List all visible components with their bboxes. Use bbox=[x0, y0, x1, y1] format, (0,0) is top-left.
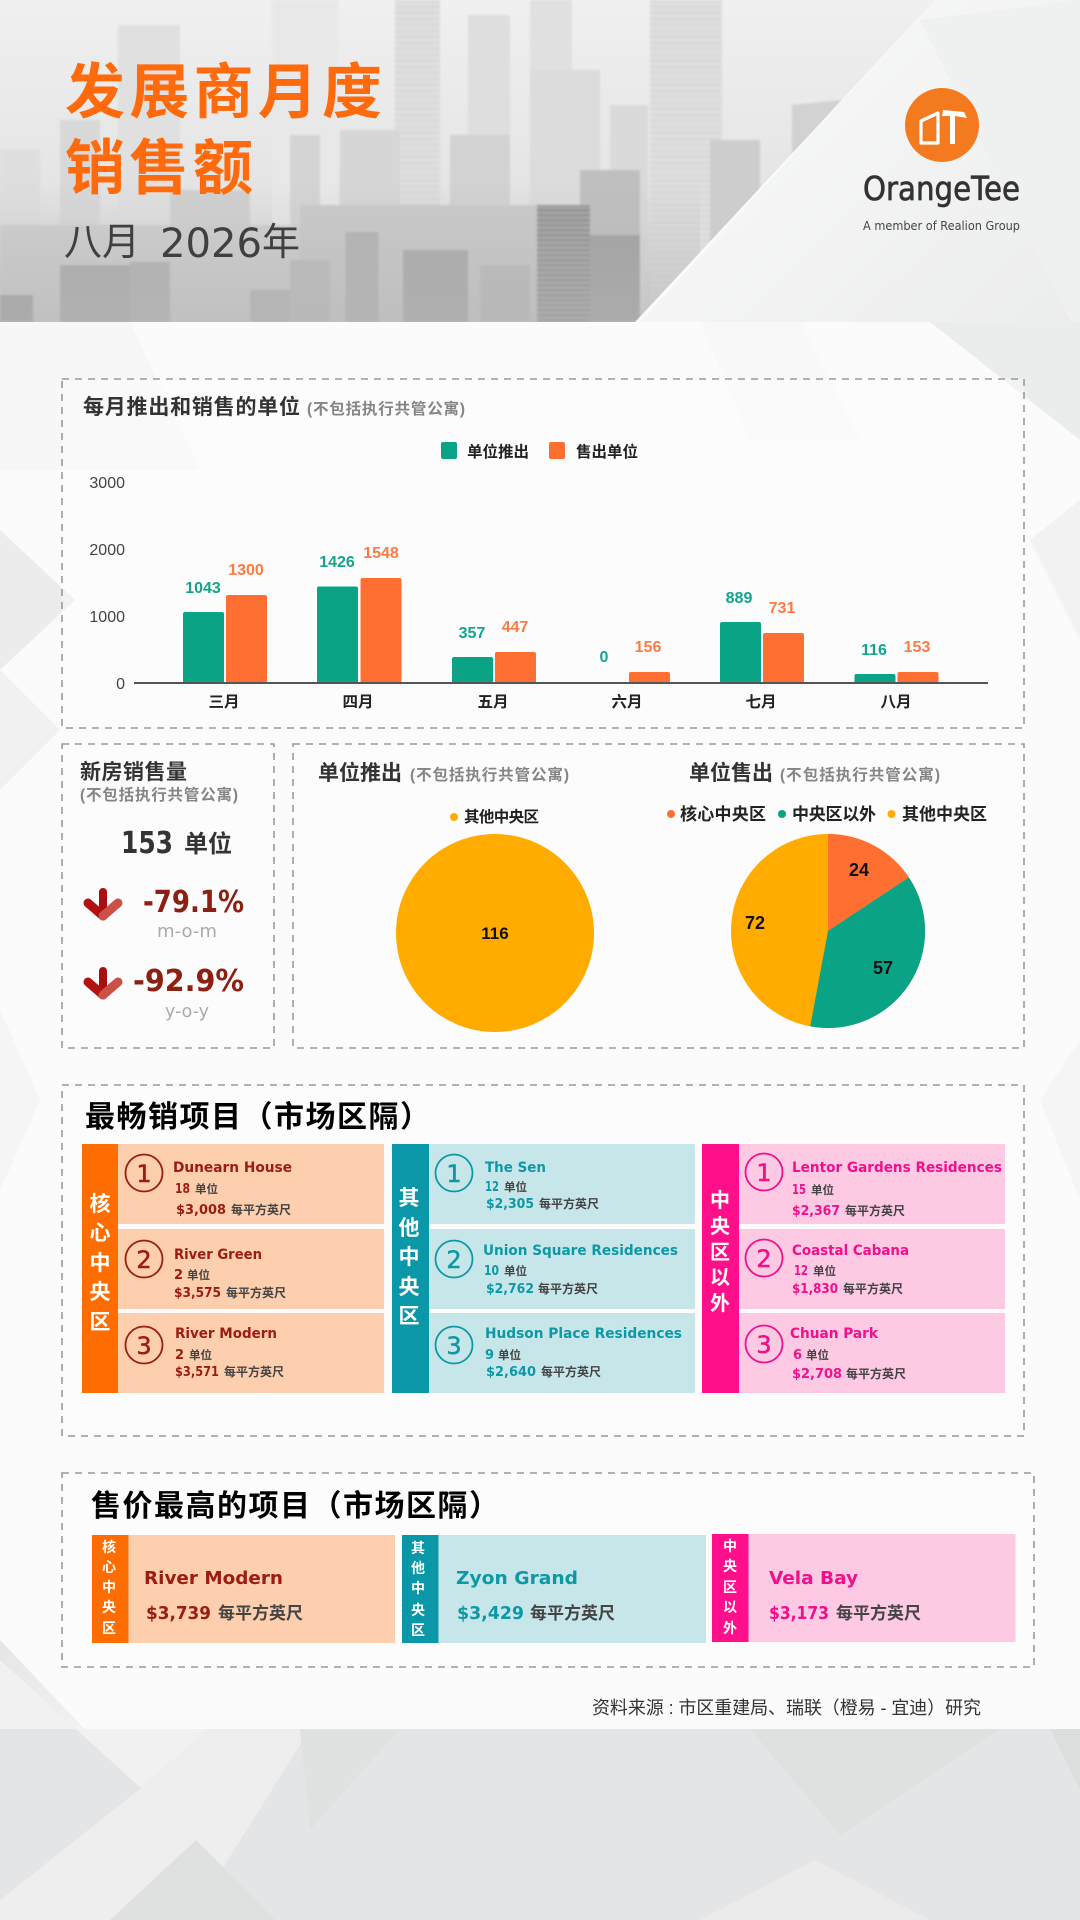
bar value labels: 357 bbox=[459, 625, 485, 642]
heading: units launched: 单位推出 bbox=[318, 761, 402, 785]
rank 1: Dunearn House: 18 bbox=[175, 1182, 190, 1197]
bar value labels: 1043 bbox=[185, 580, 221, 597]
panel: monthly launched and sold units bbox=[62, 379, 1024, 728]
y axis labels: 0 bbox=[116, 676, 125, 693]
rank 1: Lentor Gardens Residences: 每平方英尺 bbox=[845, 1203, 905, 1218]
rank 2: River Green: River Green bbox=[174, 1247, 262, 1263]
y axis labels: 2000 bbox=[89, 542, 125, 559]
rank 3: Hudson Place Residences: 每平方英尺 bbox=[541, 1364, 601, 1379]
card: core central region: 每平方英尺 bbox=[218, 1603, 303, 1623]
bar value labels bbox=[185, 545, 930, 666]
chart legend: 单位推出 bbox=[467, 442, 529, 461]
total units sold bbox=[121, 826, 232, 861]
rank 1: The Sen bbox=[436, 1154, 599, 1212]
column: outside central region: 中央区以外 bbox=[710, 1189, 730, 1315]
card: outside central region: Vela Bay bbox=[769, 1568, 858, 1589]
x axis month labels: 四月 bbox=[342, 694, 374, 711]
x axis month labels: 七月 bbox=[745, 693, 777, 711]
panel: pie charts bbox=[293, 744, 1024, 1048]
bar value labels: 889 bbox=[726, 590, 752, 607]
card: outside central region: $3,173 bbox=[769, 1603, 829, 1624]
panel: best selling projects bbox=[62, 1085, 1024, 1436]
rank 3: Hudson Place Residences: Hudson Place Residences bbox=[485, 1326, 682, 1342]
icon: down arrow year on year bbox=[88, 971, 118, 995]
rank 2: Union Square Residences: 每平方英尺 bbox=[538, 1281, 598, 1296]
month on month change bbox=[143, 885, 244, 942]
rank 3: Chuan Park: 6 bbox=[793, 1348, 802, 1363]
subtitle: month and year bbox=[64, 221, 300, 267]
rank 3: Hudson Place Residences: 3 bbox=[446, 1332, 462, 1360]
rank 3: River Modern bbox=[126, 1326, 284, 1380]
rank 2: Coastal Cabana: 2 bbox=[756, 1245, 772, 1273]
heading: monthly units: 每月推出和销售的单位 bbox=[83, 395, 300, 419]
column: core central region: 核心中央区 bbox=[90, 1192, 110, 1334]
rank 2: River Green: 2 bbox=[136, 1246, 152, 1274]
rank 2: Coastal Cabana: $1,830 bbox=[792, 1282, 838, 1297]
rank 2: River Green: 每平方英尺 bbox=[226, 1285, 286, 1300]
column: core central region bbox=[82, 1144, 384, 1393]
rank 3: Chuan Park: $2,708 bbox=[792, 1367, 842, 1382]
rank 3: River Modern: River Modern bbox=[175, 1326, 277, 1342]
heading: new home sales: (不包括执行共管公寓) bbox=[80, 785, 238, 804]
logo: OrangeTee: OrangeTee bbox=[863, 169, 1020, 208]
rank 2: River Green bbox=[126, 1240, 286, 1301]
legend: launched pie: 其他中央区 bbox=[464, 808, 539, 826]
rank 1: Dunearn House: 每平方英尺 bbox=[231, 1202, 291, 1217]
pie chart: units sold bbox=[731, 834, 925, 1028]
title bbox=[65, 59, 382, 202]
rank 1: Lentor Gardens Residences bbox=[746, 1154, 1002, 1219]
rank 1: Dunearn House: 单位 bbox=[195, 1182, 218, 1196]
panel: new home sales bbox=[62, 744, 274, 1048]
year on year change: y-o-y bbox=[165, 1001, 209, 1022]
y axis labels bbox=[89, 475, 125, 693]
panel: highest priced projects bbox=[62, 1473, 1034, 1667]
rank 3: Chuan Park: Chuan Park bbox=[790, 1326, 879, 1342]
title: 发展商月度 bbox=[65, 59, 382, 126]
month on month change: -79.1% bbox=[143, 885, 244, 920]
logo: OrangeTee bbox=[863, 88, 1020, 233]
card: core central region: 核心中央区 bbox=[102, 1539, 116, 1636]
heading: units sold: (不包括执行共管公寓) bbox=[780, 765, 940, 784]
rank 1: The Sen: The Sen bbox=[485, 1160, 546, 1176]
bar value labels: 447 bbox=[502, 619, 528, 636]
rank 2: Coastal Cabana: 12 bbox=[794, 1264, 808, 1279]
card: core central region bbox=[92, 1535, 395, 1643]
card: core central region: River Modern bbox=[144, 1568, 283, 1589]
bar value labels: 1548 bbox=[363, 545, 399, 562]
rank 1: Lentor Gardens Residences: Lentor Gardens Residences bbox=[792, 1160, 1002, 1176]
rank 2: Union Square Residences: 单位 bbox=[504, 1264, 527, 1278]
rank 2: River Green: $3,575 bbox=[174, 1286, 221, 1301]
legend: sold pie: 中央区以外 bbox=[792, 804, 876, 824]
heading: units launched bbox=[318, 761, 569, 785]
x axis month labels: 八月 bbox=[880, 694, 912, 711]
rank 1: Lentor Gardens Residences: 1 bbox=[756, 1159, 772, 1187]
card: rest of central region: $3,429 bbox=[457, 1603, 524, 1624]
chart legend bbox=[441, 442, 638, 461]
pie chart: units sold: 57 bbox=[873, 958, 893, 978]
icon: down arrow month on month bbox=[88, 892, 118, 916]
rank 2: River Green: 2 bbox=[174, 1268, 183, 1283]
card: outside central region: 每平方英尺 bbox=[836, 1603, 921, 1623]
heading: units sold bbox=[689, 761, 940, 785]
rank 3: Chuan Park: 每平方英尺 bbox=[846, 1366, 906, 1381]
heading: monthly units bbox=[83, 395, 465, 419]
y axis labels: 3000 bbox=[89, 475, 125, 492]
rank 3: Hudson Place Residences: 9 bbox=[485, 1348, 494, 1363]
rank 1: Lentor Gardens Residences: 15 bbox=[792, 1183, 806, 1198]
heading: best selling projects: 最畅销项目（市场区隔） bbox=[85, 1101, 430, 1134]
rank 2: Coastal Cabana: Coastal Cabana bbox=[792, 1243, 909, 1259]
rank 2: Union Square Residences: Union Square Residences bbox=[483, 1243, 678, 1259]
subtitle: month and year: 年 bbox=[262, 222, 300, 264]
year on year change: -92.9% bbox=[133, 964, 244, 999]
heading: new home sales: 新房销售量 bbox=[80, 760, 187, 784]
bar value labels: 156 bbox=[635, 639, 661, 656]
rank 3: Hudson Place Residences: $2,640 bbox=[486, 1365, 536, 1380]
pie chart: units sold: 24 bbox=[849, 860, 869, 880]
rank 3: River Modern: 3 bbox=[136, 1332, 152, 1360]
rank 3: River Modern: 每平方英尺 bbox=[224, 1364, 284, 1379]
card: rest of central region: 每平方英尺 bbox=[530, 1603, 615, 1623]
year on year change bbox=[133, 964, 244, 1022]
bar value labels: 1300 bbox=[228, 562, 264, 579]
rank 3: River Modern: 2 bbox=[175, 1348, 184, 1363]
rank 1: Lentor Gardens Residences: $2,367 bbox=[792, 1204, 840, 1219]
bar value labels: 731 bbox=[769, 600, 795, 617]
heading: units launched: (不包括执行共管公寓) bbox=[410, 765, 569, 784]
rank 1: The Sen: 单位 bbox=[504, 1180, 527, 1194]
card: core central region: $3,739 bbox=[146, 1603, 211, 1624]
heading: highest priced projects: 售价最高的项目（市场区隔） bbox=[91, 1490, 499, 1523]
rank 2: Coastal Cabana: 每平方英尺 bbox=[843, 1281, 903, 1296]
bar value labels: 153 bbox=[904, 639, 930, 656]
heading: new home sales bbox=[80, 760, 238, 804]
source note: 资料来源 : 市区重建局、瑞联（橙易 - 宜迪）研究 bbox=[592, 1698, 981, 1718]
bar chart bbox=[134, 578, 988, 684]
rank 1: Dunearn House: Dunearn House bbox=[173, 1160, 292, 1176]
rank 2: Coastal Cabana: 单位 bbox=[813, 1264, 836, 1278]
rank 1: The Sen: 12 bbox=[485, 1180, 499, 1195]
bar value labels: 1426 bbox=[319, 554, 355, 571]
pie chart: units launched bbox=[396, 834, 594, 1032]
month on month change: m-o-m bbox=[157, 921, 217, 942]
card: rest of central region: Zyon Grand bbox=[456, 1568, 578, 1589]
header cityscape bbox=[0, 0, 935, 322]
rank 2: Union Square Residences: 10 bbox=[484, 1264, 499, 1279]
total units sold: 153 bbox=[121, 826, 173, 861]
heading: units sold: 单位售出 bbox=[689, 761, 773, 785]
x axis month labels: 六月 bbox=[611, 693, 643, 711]
rank 1: The Sen: 1 bbox=[446, 1160, 462, 1188]
rank 2: Union Square Residences: 2 bbox=[446, 1246, 462, 1274]
subtitle: month and year: 八月 bbox=[64, 222, 140, 264]
rank 3: Hudson Place Residences: 单位 bbox=[498, 1348, 521, 1362]
card: rest of central region bbox=[402, 1535, 706, 1643]
pie chart: units launched: 116 bbox=[481, 924, 509, 943]
heading: monthly units: (不包括执行共管公寓) bbox=[307, 399, 465, 418]
column: rest of central region: 其他中央区 bbox=[398, 1187, 420, 1328]
rank 2: Coastal Cabana bbox=[746, 1240, 909, 1297]
x axis month labels: 三月 bbox=[208, 694, 240, 711]
rank 1: The Sen: $2,305 bbox=[486, 1197, 534, 1212]
rank 1: Dunearn House bbox=[126, 1154, 292, 1218]
rank 2: River Green: 单位 bbox=[187, 1268, 210, 1282]
card: outside central region: 中央区以外 bbox=[723, 1538, 737, 1636]
rank 3: Chuan Park bbox=[746, 1326, 906, 1382]
pie chart: units sold: 72 bbox=[745, 913, 765, 933]
rank 3: Hudson Place Residences bbox=[436, 1326, 682, 1380]
subtitle: month and year: 2026 bbox=[160, 221, 262, 267]
bar value labels: 116 bbox=[861, 642, 887, 659]
legend: sold pie: 核心中央区 bbox=[680, 804, 766, 824]
legend: sold pie: 其他中央区 bbox=[902, 804, 987, 824]
rank 3: Chuan Park: 单位 bbox=[806, 1348, 829, 1362]
rank 1: Lentor Gardens Residences: 单位 bbox=[811, 1183, 834, 1197]
y axis labels: 1000 bbox=[89, 609, 125, 626]
x axis month labels: 五月 bbox=[477, 694, 509, 711]
rank 3: Chuan Park: 3 bbox=[756, 1331, 772, 1359]
bar value labels: 0 bbox=[600, 649, 609, 666]
rank 2: Union Square Residences: $2,762 bbox=[486, 1282, 534, 1297]
column: rest of central region bbox=[392, 1144, 695, 1393]
rank 2: Union Square Residences bbox=[436, 1240, 678, 1297]
total units sold: 单位 bbox=[184, 830, 232, 858]
column: outside central region bbox=[702, 1144, 1005, 1393]
rank 1: The Sen: 每平方英尺 bbox=[539, 1196, 599, 1211]
rank 3: River Modern: 单位 bbox=[189, 1348, 212, 1362]
chart legend: 售出单位 bbox=[576, 442, 638, 461]
rank 1: Dunearn House: 1 bbox=[136, 1160, 152, 1188]
x axis month labels bbox=[208, 693, 912, 711]
logo: OrangeTee: A member of Realion Group bbox=[863, 219, 1020, 233]
rank 1: Dunearn House: $3,008 bbox=[176, 1203, 226, 1218]
card: rest of central region: 其他中央区 bbox=[411, 1540, 425, 1638]
title: 销售额 bbox=[65, 135, 253, 202]
rank 3: River Modern: $3,571 bbox=[175, 1365, 219, 1380]
card: outside central region bbox=[712, 1534, 1016, 1642]
legend: sold pie bbox=[667, 804, 987, 824]
